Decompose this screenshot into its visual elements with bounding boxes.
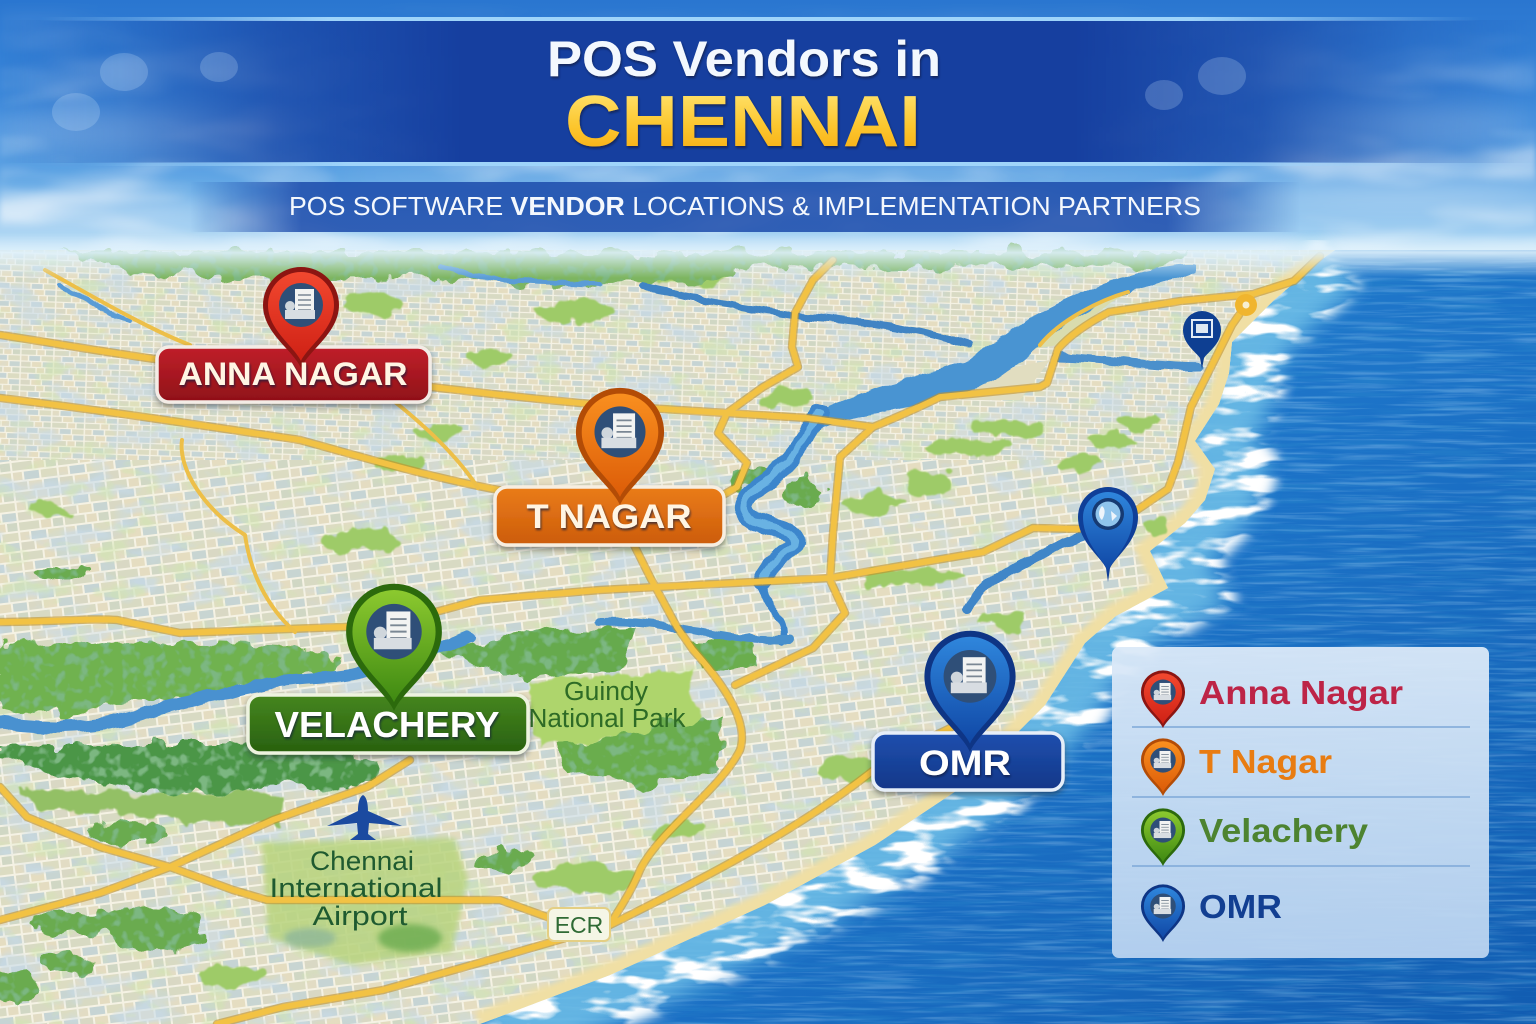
legend item: T Nagar: T Nagar <box>1199 743 1332 780</box>
Chennai International Airport label: International <box>270 873 442 903</box>
small pin: north <box>1183 311 1221 369</box>
legend item: Velachery <box>1141 808 1369 866</box>
roads <box>0 256 1320 1024</box>
legend item: Anna Nagar <box>1141 670 1403 728</box>
bokeh circles <box>52 52 1246 131</box>
legend item: OMR: OMR <box>1199 888 1282 925</box>
rivers <box>0 264 1200 727</box>
panel: legend <box>1112 647 1489 958</box>
Chennai International Airport label: Chennai <box>310 846 414 876</box>
location: Anna Nagar <box>157 267 430 402</box>
top right roundabout marker <box>1235 294 1257 316</box>
green areas: pale parks <box>20 266 1168 987</box>
Chennai International Airport label: Airport <box>312 901 408 931</box>
small pin: central coast <box>1078 487 1138 582</box>
location: Velachery: VELACHERY <box>274 704 500 745</box>
title <box>547 31 941 162</box>
location: OMR: OMR <box>919 744 1011 783</box>
legend item: Velachery: Velachery <box>1199 812 1369 849</box>
Guindy National Park label: Guindy <box>564 678 648 706</box>
location: OMR <box>873 631 1063 790</box>
title: POS Vendors in <box>547 31 941 87</box>
ECR road label <box>548 908 610 941</box>
sky background <box>0 0 1536 256</box>
forest and tree clusters <box>0 252 1190 1003</box>
header band <box>0 17 1536 166</box>
title: CHENNAI <box>565 82 921 162</box>
location: T Nagar <box>495 388 724 545</box>
ocean <box>400 250 1536 1024</box>
Chennai International Airport label <box>270 846 442 931</box>
Guindy National Park label: National Park <box>528 705 686 733</box>
subtitle band: POS SOFTWARE VENDOR LOCATIONS & IMPLEMENTATION PARTNERS <box>289 193 1201 221</box>
land map <box>0 250 1350 1024</box>
ECR road label: ECR <box>555 912 603 938</box>
location: Velachery <box>248 584 528 753</box>
legend item: Anna Nagar: Anna Nagar <box>1199 674 1403 711</box>
location: T Nagar: T NAGAR <box>526 498 692 536</box>
legend item: T Nagar <box>1141 738 1332 796</box>
subtitle band <box>190 182 1300 232</box>
icon: airplane <box>327 795 402 840</box>
airport area <box>262 838 468 965</box>
Guindy National Park label <box>528 678 686 733</box>
location: Anna Nagar: ANNA NAGAR <box>178 356 408 392</box>
haze between sky and map <box>0 232 1536 278</box>
legend item: OMR <box>1141 884 1282 942</box>
